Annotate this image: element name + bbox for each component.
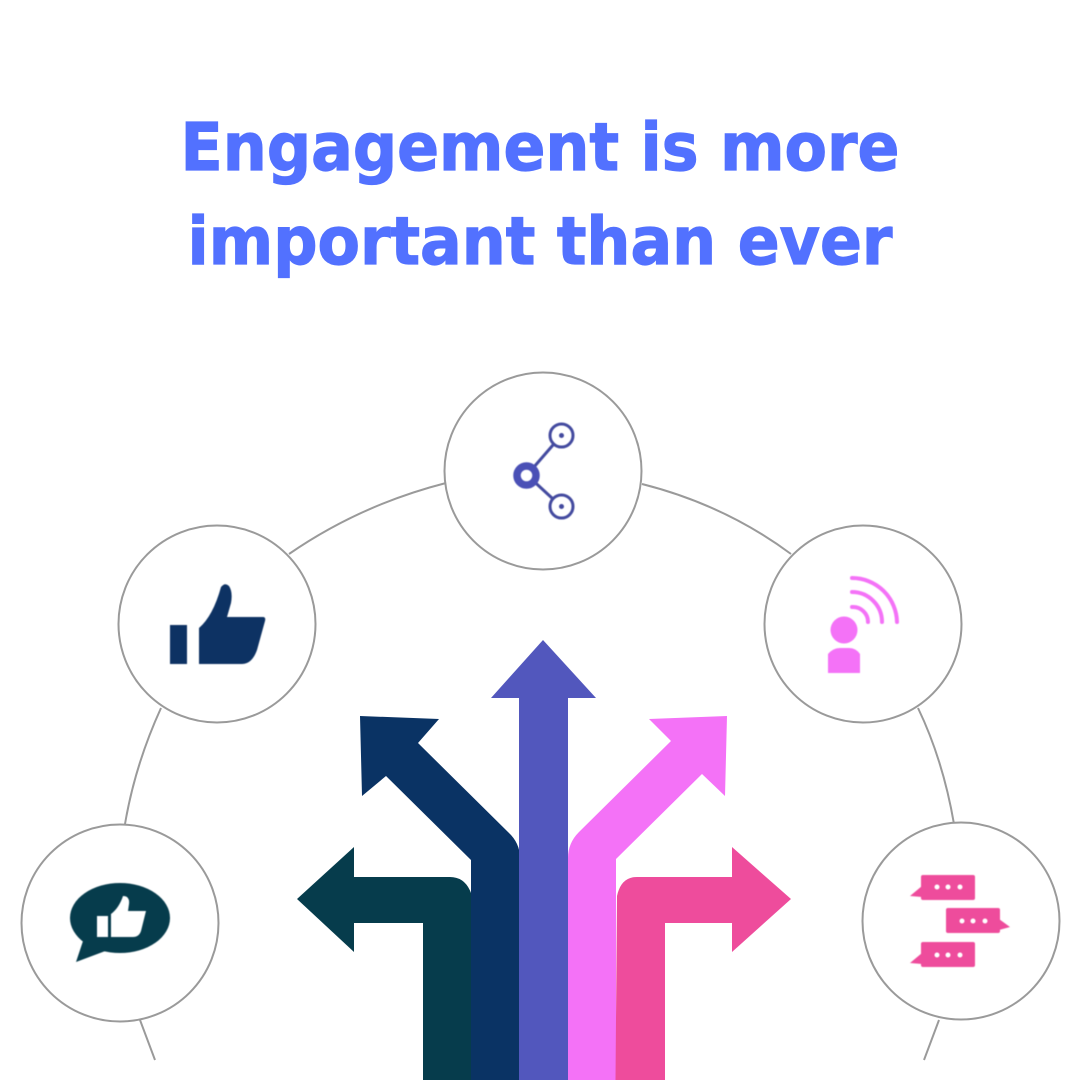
circle: chat messages (862, 822, 1060, 1020)
icon: speech bubble like (70, 883, 170, 962)
arrow: upper right pink (568, 716, 727, 1080)
arrow: up purple (491, 640, 596, 1080)
title (181, 109, 899, 280)
title: important than ever (188, 203, 892, 280)
arrow: right magenta (616, 847, 791, 1080)
circle: share (444, 372, 642, 570)
connecting arc (125, 483, 954, 1060)
icon: thumbs up (170, 584, 265, 664)
arrow: upper left navy (360, 716, 520, 1080)
circle: broadcast person (764, 526, 962, 722)
icon: share (517, 424, 573, 518)
icon: chat messages (910, 875, 1010, 967)
icon: broadcast person (828, 578, 897, 673)
arrow: left teal (297, 847, 473, 1080)
title: Engagement is more (181, 109, 899, 186)
circle: thumbs up (118, 526, 316, 722)
circle: speech bubble like (22, 824, 218, 1022)
